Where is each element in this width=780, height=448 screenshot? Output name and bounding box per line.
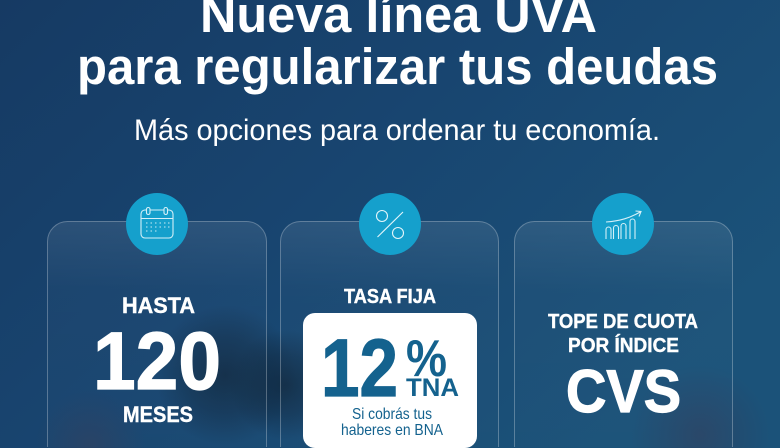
subtitle: Más opciones para ordenar tu economía. [134,114,660,147]
label: tope de cuota [548,311,698,357]
icon: percent [359,193,421,255]
title [77,0,718,95]
note [341,406,443,439]
number: 120: 120 [93,316,221,407]
note: Si cobrás tus [352,406,432,423]
panel: tasa [280,193,498,448]
white rate box [303,313,477,448]
percent sign: % [406,330,447,388]
icon: calendar [126,193,188,255]
number: 12: 12 [321,323,398,414]
label: TNA: TNA [406,374,459,402]
title: para regularizar tus deudas [77,38,718,95]
panel: plazo [48,193,266,447]
note: haberes en BNA [341,422,443,439]
label: hasta: HASTA [122,293,195,318]
label: meses: MESES [123,402,193,427]
label: CVS: CVS [566,358,681,425]
label: tasa fija: TASA FIJA [344,286,436,308]
icon: growth chart [592,193,654,255]
label: tope de cuota: POR ÍNDICE [568,334,679,357]
panel: tope [514,193,732,447]
label: tope de cuota: TOPE DE CUOTA [548,311,698,333]
